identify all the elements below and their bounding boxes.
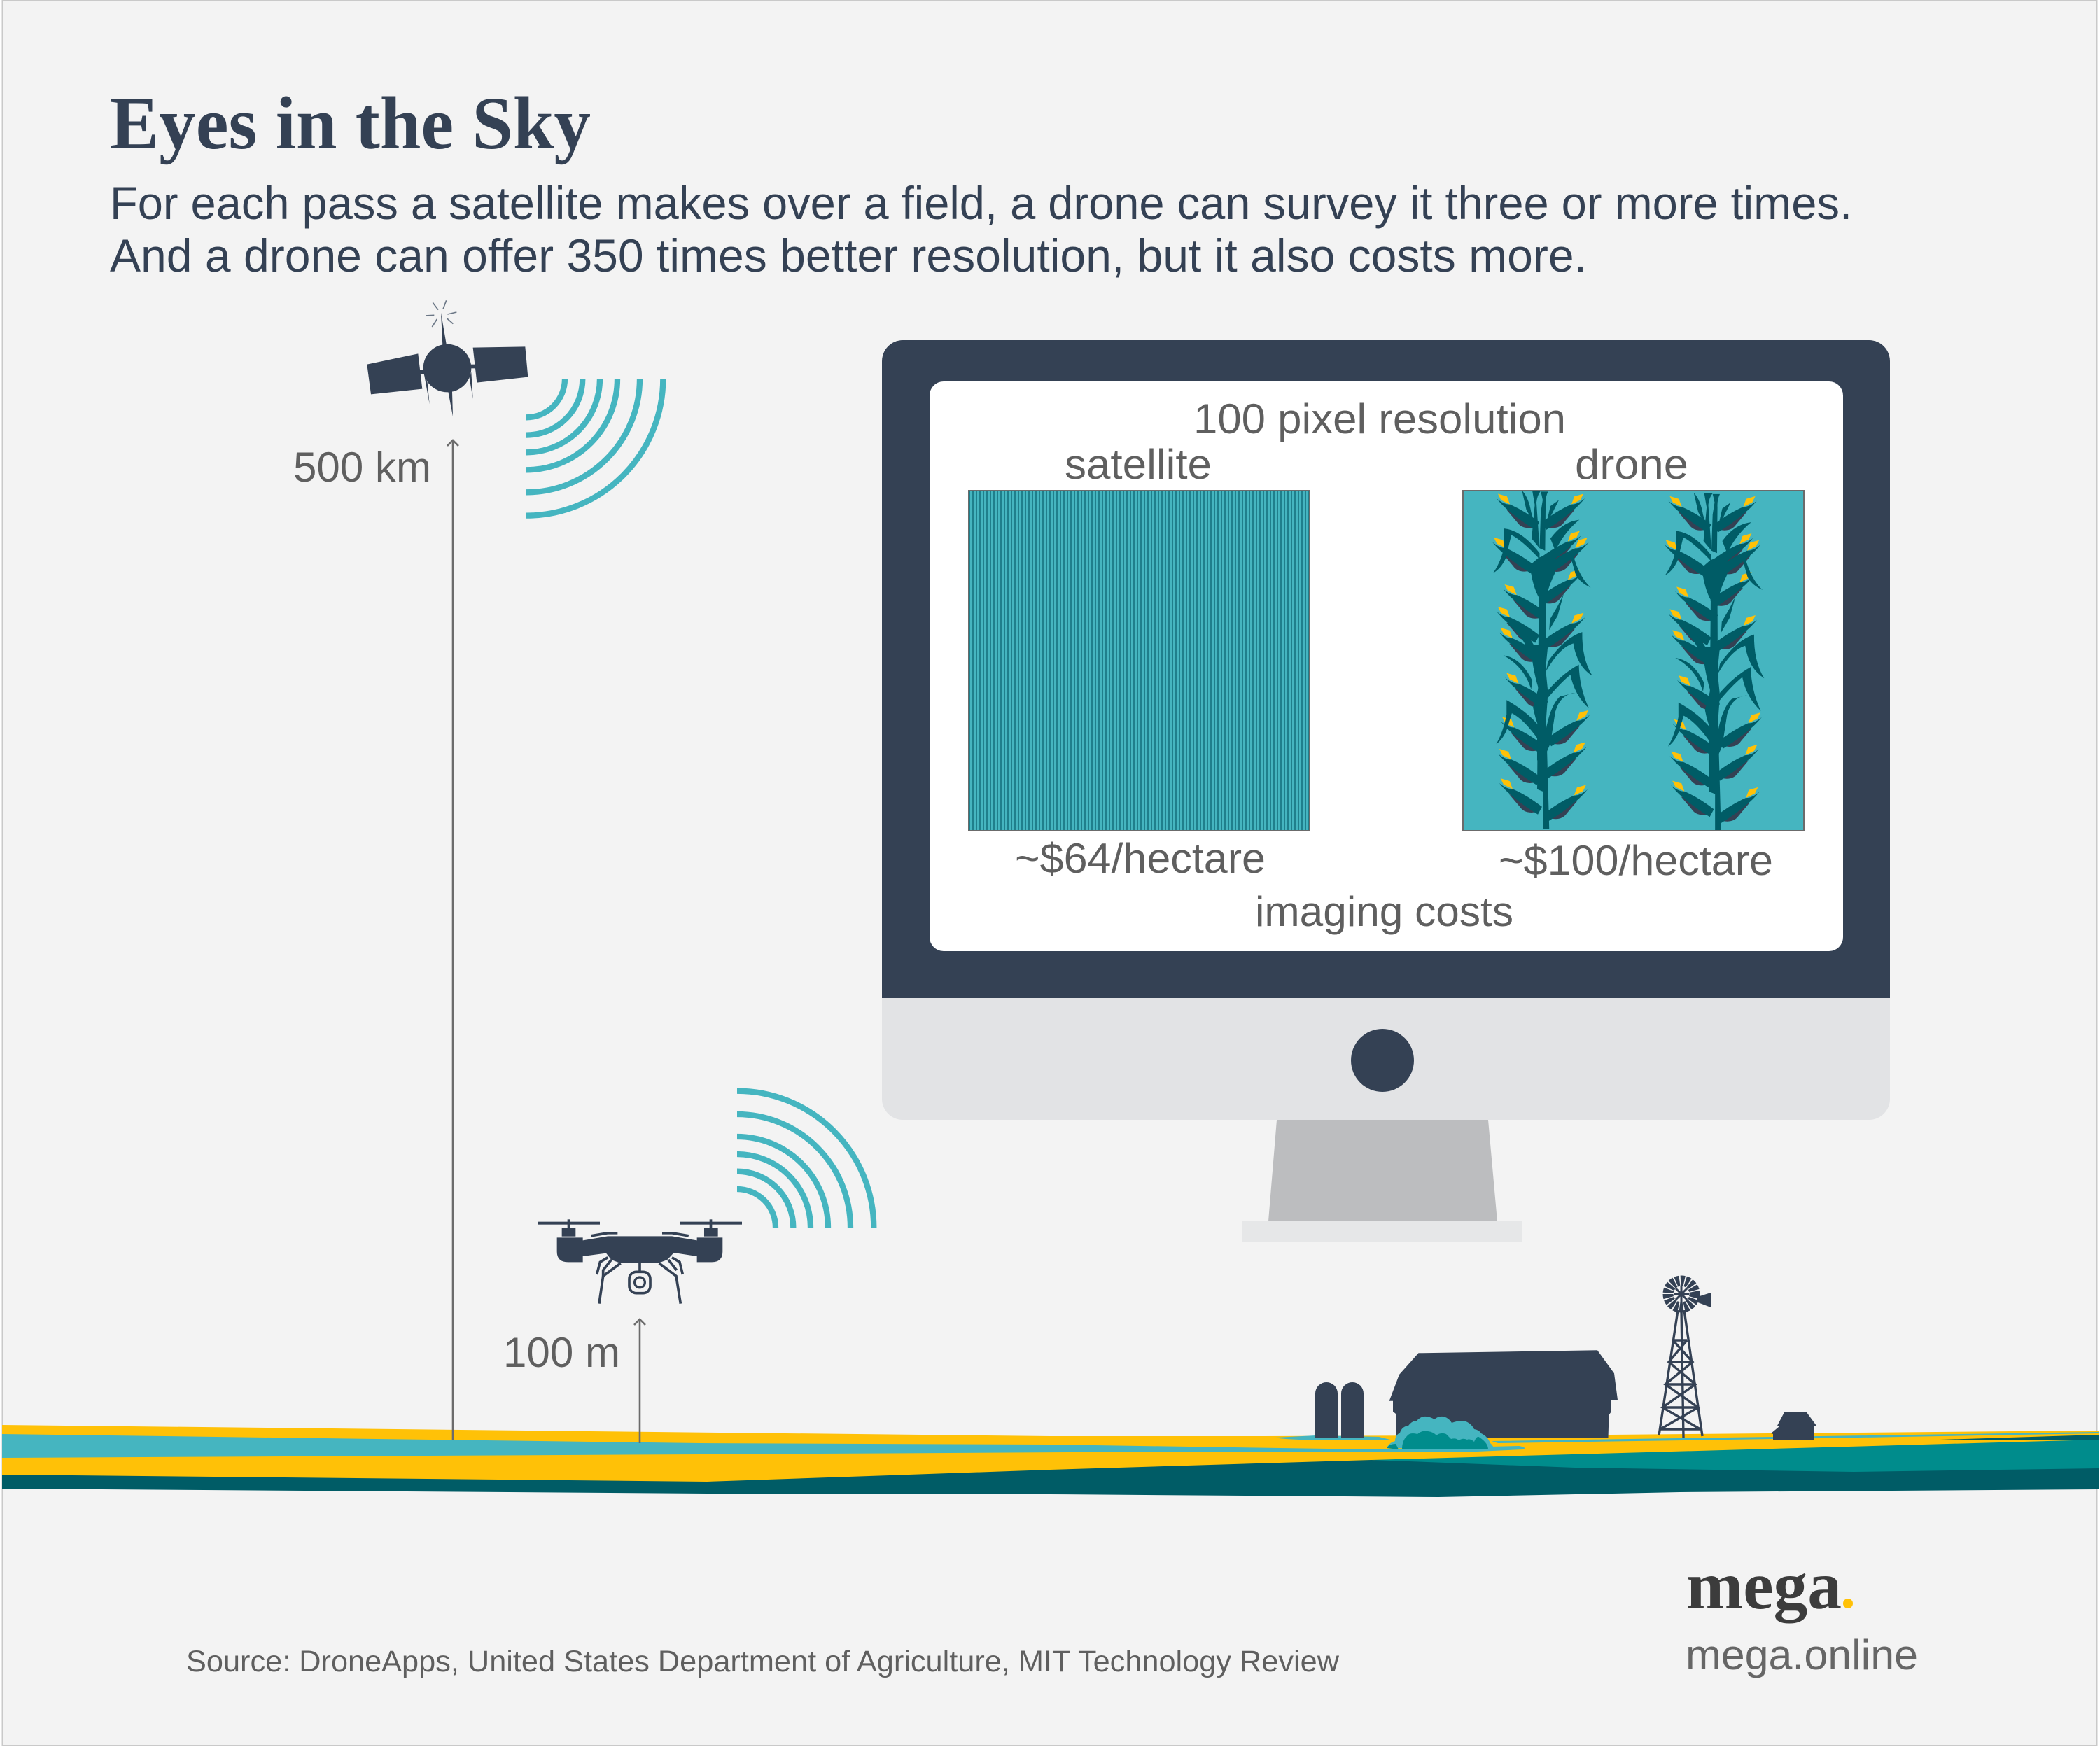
monitor frame <box>882 340 1890 998</box>
monitor stand base <box>1242 1221 1522 1242</box>
barn <box>1390 1350 1618 1438</box>
subtitle: And a drone can offer 350 times better resolution, but it also costs more. <box>110 230 1587 281</box>
panel: monitor <box>882 340 1890 1242</box>
logo: mega: mega <box>1686 1548 1842 1624</box>
pond <box>1275 1435 1393 1440</box>
far stream <box>1492 1432 2099 1443</box>
icon: small house <box>1771 1412 1816 1440</box>
monitor screen <box>930 381 1843 951</box>
satellite signal waves <box>526 379 663 516</box>
label: satellite: satellite <box>1065 441 1212 488</box>
landscape <box>2 1425 2099 1497</box>
monitor button <box>1351 1029 1414 1092</box>
drone signal waves <box>737 1091 874 1228</box>
label: 500 km: 500 km <box>293 444 431 491</box>
cost: satellite: ~$64/hectare <box>1015 835 1266 882</box>
icon: windmill <box>1659 1281 1711 1438</box>
yellow field <box>2 1425 2099 1484</box>
label: drone: drone <box>1575 441 1688 488</box>
altitude arrow: drone <box>634 1319 645 1443</box>
satellite image: striped pixels <box>969 491 1310 831</box>
icon: drone <box>538 1219 742 1304</box>
icon: satellite <box>367 300 528 416</box>
silos <box>1315 1382 1364 1438</box>
caption: imaging costs: imaging costs <box>1255 888 1513 935</box>
subtitle <box>110 177 1852 281</box>
subtitle: For each pass a satellite makes over a field, a drone can survey it three or more times. <box>110 177 1852 229</box>
river <box>2 1434 1525 1458</box>
cost: drone: ~$100/hectare <box>1499 837 1773 884</box>
icon: bush <box>1387 1417 1494 1449</box>
title: Eyes in the Sky <box>110 83 591 165</box>
dark teal foreground <box>2 1460 2099 1497</box>
bright teal field <box>1371 1440 2099 1477</box>
altitude arrow: satellite <box>447 440 458 1440</box>
drone image: corn plants <box>1463 491 1804 831</box>
label: 100 m: 100 m <box>503 1329 620 1376</box>
dark teal far wedge <box>1918 1435 2099 1440</box>
source: Source: DroneApps, United States Department of Agriculture, MIT Technology Review <box>186 1645 1340 1678</box>
farm buildings <box>1315 1350 1618 1438</box>
screen heading: 100 pixel resolution <box>1194 395 1566 442</box>
logo url: mega.online <box>1686 1631 1918 1678</box>
monitor bezel <box>882 998 1890 1120</box>
monitor stand <box>1268 1120 1497 1221</box>
